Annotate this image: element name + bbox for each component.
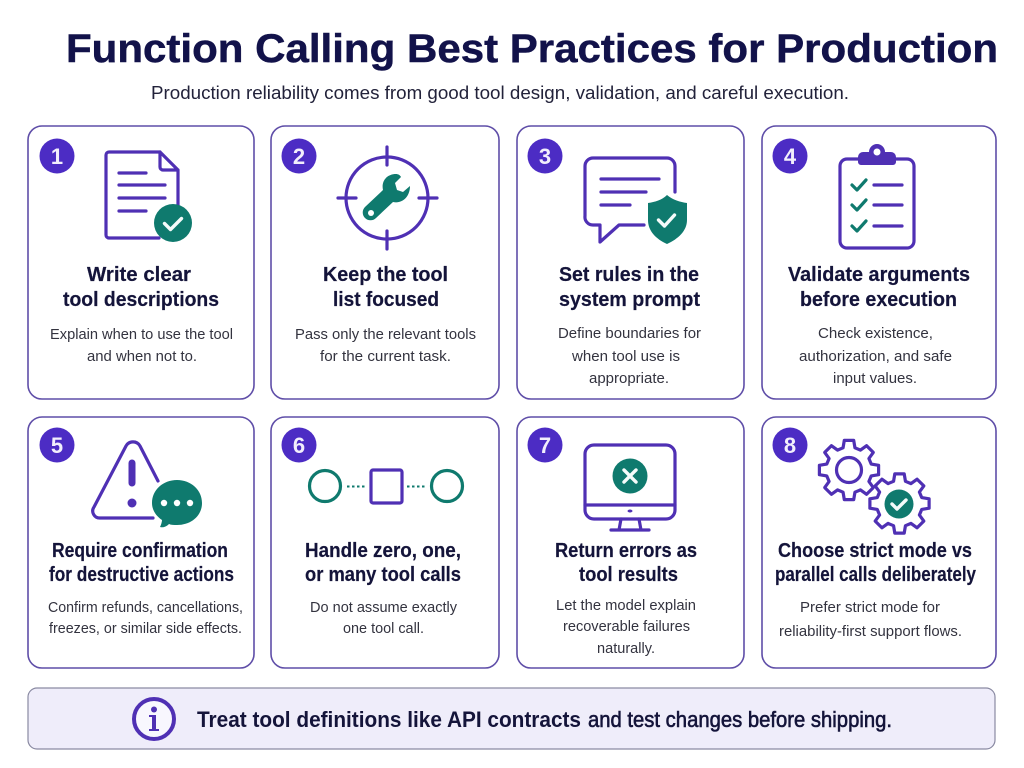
badge 7: 7	[539, 433, 551, 458]
panel: card 4 validate arguments before execution: input values.	[833, 370, 917, 387]
badge 8	[772, 428, 808, 462]
body text: Check existence,	[818, 325, 933, 342]
badge 3	[528, 138, 562, 174]
panel: card 7 return errors: tool results	[579, 564, 678, 586]
panel: card 3 set rules in the system prompt: system prompt	[559, 289, 700, 311]
body text: Do not assume exactly	[310, 599, 457, 616]
panel: card 7 return errors	[517, 417, 744, 668]
icon: warning triangle with chat	[93, 442, 202, 527]
icon: chat bubble with shield	[585, 158, 687, 244]
panel: card 3 set rules in the system prompt: when tool use is	[571, 348, 680, 365]
callout: footer banner	[28, 688, 995, 749]
panel: card 8 strict mode vs parallel: reliability-first support flows.	[779, 623, 962, 640]
panel: card 2 keep the tool list focused: list focused	[333, 289, 439, 311]
panel: card 4 validate arguments before execution: before execution	[800, 289, 957, 311]
body text: Explain when to use the tool	[50, 326, 233, 343]
panel: card 7 return errors: naturally.	[597, 640, 655, 657]
panel: card 5 require confirmation: freezes, or similar side effects.	[49, 620, 242, 637]
panel: card 4 validate arguments before execution	[762, 126, 996, 399]
panel: card 8 strict mode vs parallel: parallel calls deliberately	[775, 564, 977, 586]
icon: info circle	[134, 699, 174, 739]
badge 6: 6	[293, 433, 305, 458]
badge 6	[282, 428, 316, 462]
icon: clipboard checklist	[840, 144, 914, 248]
body text: Confirm refunds, cancellations,	[48, 599, 243, 616]
badge 2	[282, 138, 316, 174]
badge 1: 1	[51, 144, 63, 169]
badge 5: 5	[51, 433, 63, 458]
title: Function Calling Best Practices for Production	[66, 27, 998, 71]
badge 2: 2	[293, 144, 305, 169]
callout: footer banner: and test changes before shipping.	[588, 707, 892, 732]
badge 8: 8	[784, 433, 796, 458]
panel: card 1 write clear tool descriptions: tool descriptions	[63, 289, 219, 311]
badge 4	[772, 138, 808, 174]
heading: Set rules in the	[559, 264, 699, 286]
panel: card 7 return errors: recoverable failures	[563, 618, 690, 635]
panel: card 5 require confirmation: for destructive actions	[49, 564, 234, 586]
panel: card 3 set rules in the system prompt: appropriate.	[589, 370, 669, 387]
panel: card 6 handle zero one or many: one tool call.	[343, 620, 424, 637]
icon: target with wrench	[338, 147, 437, 249]
panel: card 6 handle zero one or many	[271, 417, 499, 668]
badge 3: 3	[539, 144, 551, 169]
heading: Require confirmation	[52, 540, 228, 562]
heading: Validate arguments	[788, 264, 970, 286]
panel: card 2 keep the tool list focused	[271, 126, 499, 399]
heading: Choose strict mode vs	[778, 540, 972, 562]
panel: card 5 require confirmation	[28, 417, 254, 668]
badge 1	[40, 138, 74, 174]
heading: Return errors as	[555, 540, 697, 562]
body text: Define boundaries for	[558, 325, 701, 342]
panel: card 6 handle zero one or many: or many tool calls	[305, 564, 461, 586]
heading: Handle zero, one,	[305, 540, 461, 562]
body text: Pass only the relevant tools	[295, 326, 476, 343]
heading: Keep the tool	[323, 264, 448, 286]
callout text: Treat tool definitions like API contracts	[197, 707, 581, 732]
icon: monitor with error	[585, 445, 675, 530]
panel: card 2 keep the tool list focused: for the current task.	[320, 348, 451, 365]
panel: card 8 strict mode vs parallel	[762, 417, 996, 668]
badge 4: 4	[784, 144, 797, 169]
badge 5	[40, 428, 74, 462]
icon: document with check	[106, 152, 192, 242]
heading: Write clear	[87, 264, 191, 286]
subtitle: Production reliability comes from good tool design, validation, and careful execution.	[151, 83, 849, 103]
panel: card 4 validate arguments before execution: authorization, and safe	[799, 348, 952, 365]
panel: card 3 set rules in the system prompt	[517, 126, 744, 399]
body text: Let the model explain	[556, 597, 696, 614]
icon: nodes flow	[310, 470, 462, 503]
body text: Prefer strict mode for	[800, 599, 940, 616]
icon: gears with check	[819, 440, 929, 533]
badge 7	[528, 428, 562, 462]
panel: card 1 write clear tool descriptions	[28, 126, 254, 399]
panel: card 1 write clear tool descriptions: and when not to.	[87, 348, 197, 365]
